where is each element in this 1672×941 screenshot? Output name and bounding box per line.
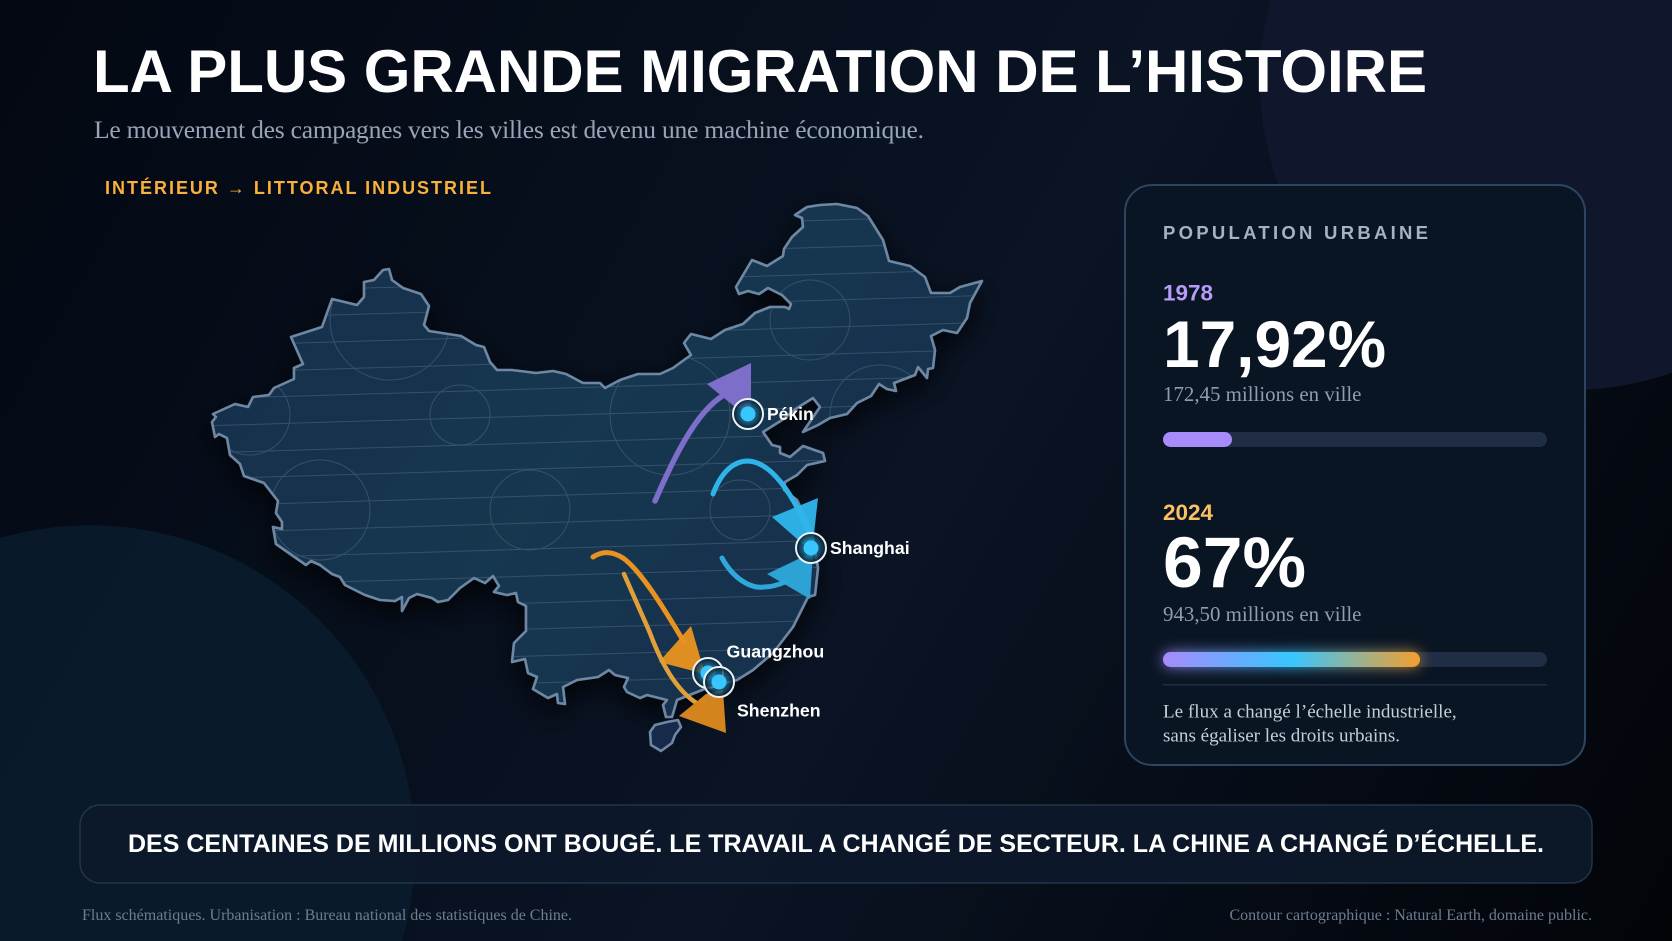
label: Pékin: Pékin <box>767 404 814 424</box>
marker: Shanghai <box>796 533 826 563</box>
bar 1978 <box>1163 432 1547 447</box>
source note left: Flux schématiques. Urbanisation : Bureau national des statistiques de Chine. <box>82 907 572 924</box>
value 1978: 17,92% <box>1163 307 1386 381</box>
panel note: Le flux a changé l’échelle industrielle, <box>1163 702 1457 722</box>
panel: population urbaine <box>1125 185 1585 765</box>
mainland outline <box>212 204 982 717</box>
banner <box>80 805 1592 883</box>
year 1978: 1978 <box>1163 280 1213 306</box>
banner text: DES CENTAINES DE MILLIONS ONT BOUGÉ. LE TRAVAIL A CHANGÉ DE SECTEUR. LA CHINE A CHANGÉ D’ÉCHELLE. <box>128 829 1544 858</box>
title: LA PLUS GRANDE MIGRATION DE L’HISTOIRE <box>93 38 1427 105</box>
marker: Pékin <box>733 399 763 429</box>
detail 2024: 943,50 millions en ville <box>1163 602 1361 626</box>
source note right: Contour cartographique : Natural Earth, domaine public. <box>1229 907 1592 924</box>
arrow: inland to Shanghai north <box>713 461 818 552</box>
map of China with migration flows <box>200 204 1000 751</box>
panel note line 2: sans égaliser les droits urbains. <box>1163 726 1400 746</box>
arrow: inland to Shenzhen <box>624 574 726 733</box>
marker: Shenzhen <box>704 667 734 697</box>
marker: Guangzhou <box>693 658 723 688</box>
detail 1978: 172,45 millions en ville <box>1163 382 1361 406</box>
Hainan island <box>650 720 681 751</box>
panel heading: POPULATION URBAINE <box>1163 222 1428 243</box>
label: Guangzhou: Guangzhou <box>726 642 824 662</box>
label: Shenzhen: Shenzhen <box>737 700 821 720</box>
arrow: inland to Guangzhou <box>593 553 705 674</box>
arrow: inland to Shanghai south <box>722 552 813 599</box>
bar 2024 <box>1163 652 1547 667</box>
year 2024: 2024 <box>1163 500 1214 525</box>
map heading: INTÉRIEUR → LITTORAL INDUSTRIEL <box>105 177 491 198</box>
value 2024: 67% <box>1163 523 1306 603</box>
arrow: inland to Beijing <box>655 363 751 501</box>
label: Shanghai: Shanghai <box>830 538 910 558</box>
subtitle: Le mouvement des campagnes vers les villes est devenu une machine économique. <box>94 115 924 144</box>
